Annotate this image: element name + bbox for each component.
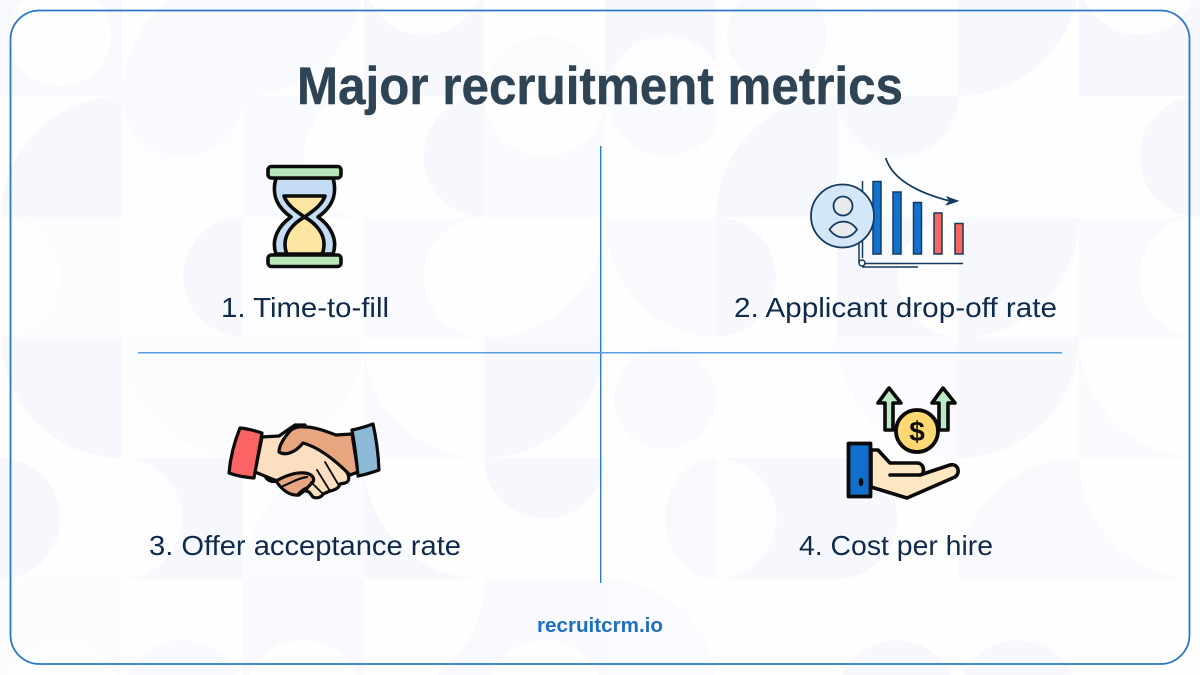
label: offer acceptance rate: 3. Offer acceptance rate [149,530,461,561]
footer: website: recruitcrm.io [537,615,663,637]
label: cost per hire: 4. Cost per hire [799,530,993,561]
label: applicant drop-off rate: 2. Applicant drop-off rate [734,292,1057,323]
icon: hand with coin and rising arrows: $ [909,416,925,447]
label: time-to-fill: 1. Time-to-fill [221,292,389,323]
icon: handshake [229,424,379,498]
icon: applicant drop-off chart [811,158,963,267]
icon: hourglass [268,166,341,266]
title: Major recruitment metrics [297,57,903,116]
icon: hand with coin and rising arrows [848,388,958,498]
